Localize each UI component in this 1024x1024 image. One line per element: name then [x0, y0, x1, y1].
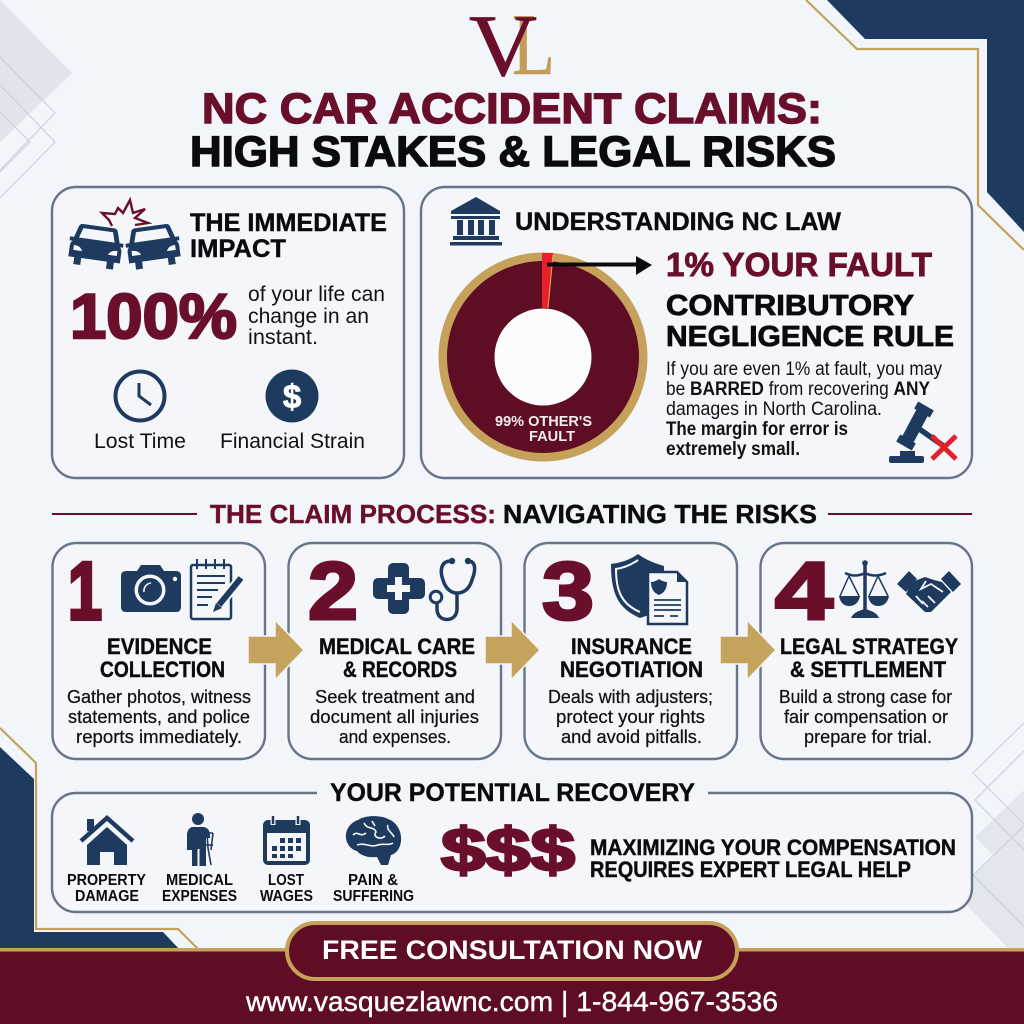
section heading: the claim process: [52, 499, 972, 529]
label: property damage: PROPERTY: [67, 872, 147, 889]
label: pain and suffering: [333, 872, 414, 905]
text: contributory negligence explanation: damages in North Carolina.: [666, 399, 882, 420]
heading: LEGAL STRATEGY: [780, 634, 958, 659]
panel: your potential recovery: [52, 779, 972, 912]
icon: crashing cars: [66, 200, 183, 271]
chart: fault donut: [438, 252, 648, 462]
icon: dollar: [266, 370, 318, 422]
panel: step 4 legal strategy and settlement: [760, 543, 972, 759]
text: [67, 686, 251, 747]
heading: your potential recovery: YOUR POTENTIAL RECOVERY: [330, 779, 695, 807]
arrow: to 1% your fault: [547, 256, 652, 275]
label: property damage: DAMAGE: [75, 888, 139, 905]
background decoration: bottom right: [955, 723, 1024, 948]
text: Seek treatment and: [315, 686, 475, 707]
heading: contributory negligence rule: [666, 290, 954, 353]
logo: VL monogram: V: [469, 0, 537, 95]
label: lost wages: LOST: [268, 872, 304, 889]
icon: person with crutch: [187, 813, 213, 866]
icon: dollar: $: [283, 378, 301, 415]
text: fair compensation or: [784, 706, 948, 727]
heading: contributory negligence rule: CONTRIBUTORY: [666, 290, 914, 322]
icon: gavel with red x: [889, 406, 956, 463]
icon: house: [81, 818, 133, 865]
text: protect your rights: [556, 706, 705, 727]
heading: the immediate impact: IMPACT: [190, 235, 286, 263]
heading: MEDICAL CARE: [319, 634, 475, 659]
label: lost wages: WAGES: [260, 888, 313, 905]
corner: bottom left navy and gold: [0, 728, 198, 950]
text: [779, 686, 952, 747]
heading: EVIDENCE: [107, 634, 212, 659]
text: Build a strong case for: [779, 686, 952, 707]
panel: step 1 evidence collection: [52, 543, 265, 759]
stat: 100%: 100%: [70, 282, 237, 352]
heading: [319, 634, 475, 682]
text: life can change: [248, 283, 385, 349]
icon: calendar: [263, 815, 310, 865]
heading: & RECORDS: [343, 657, 457, 682]
chart: fault donut: 99% OTHER'S: [495, 413, 592, 430]
text: contributory negligence explanation: extremely small.: [666, 439, 800, 460]
label: lost wages: [260, 872, 313, 905]
number 1: 1: [68, 546, 102, 637]
label: financial strain: Financial Strain: [220, 430, 365, 453]
number 4: 4: [775, 546, 833, 637]
label: medical expenses: EXPENSES: [162, 888, 237, 905]
callout: 1% your fault: 1% YOUR FAULT: [666, 246, 932, 283]
text: life can change: change in an: [248, 305, 369, 328]
text: statements, and police: [68, 706, 250, 727]
title: NC CAR ACCIDENT CLAIMS:: [202, 85, 822, 133]
icon: courthouse: [450, 197, 502, 246]
text: life can change: instant.: [248, 326, 318, 349]
text: [548, 686, 713, 747]
heading: COLLECTION: [100, 657, 225, 682]
text: Gather photos, witness: [67, 686, 251, 707]
heading: [780, 634, 958, 682]
heading: understanding NC law: UNDERSTANDING NC LAW: [515, 208, 841, 236]
panel: the immediate impact: [52, 187, 404, 478]
heading: contributory negligence rule: NEGLIGENCE RULE: [666, 321, 954, 353]
text: contributory negligence explanation: If you are even 1% at fault, you may: [666, 359, 942, 380]
text: contributory negligence explanation: [666, 359, 942, 460]
text: life can change: of your life can: [248, 283, 385, 306]
dollar signs: $$$: [441, 816, 575, 884]
text: contributory negligence explanation: be BARRED from recovering ANY: [666, 379, 930, 400]
text: reports immediately.: [76, 726, 242, 747]
background decoration: top left: [0, 0, 72, 198]
contact line: www.vasquezlawnc.com | 1-844-967-3536: [245, 986, 778, 1017]
label: pain and suffering: SUFFERING: [333, 888, 414, 905]
icon: camera: [121, 565, 181, 612]
corner: top right navy and gold: [806, 0, 1024, 250]
text: maximizing your compensation: REQUIRES EXPERT LEGAL HELP: [590, 857, 911, 882]
call to action button: FREE CONSULTATION NOW: [322, 935, 703, 965]
section heading: the claim process: NAVIGATING THE RISKS: [503, 499, 817, 529]
call to action button: [287, 923, 737, 979]
icon: clock: [116, 372, 164, 420]
arrow: step 2 to 3: [485, 620, 540, 680]
heading: & SETTLEMENT: [790, 657, 947, 682]
text: document all injuries: [310, 706, 479, 727]
text: maximizing your compensation: [590, 835, 956, 882]
label: property damage: [67, 872, 147, 905]
chart: fault donut: FAULT: [529, 428, 575, 445]
icon: notepad and pencil: [191, 559, 241, 619]
text: and avoid pitfalls.: [561, 726, 702, 747]
arrow: step 3 to 4: [720, 620, 776, 680]
icon: shield and document: [611, 554, 687, 624]
panel: step 2 medical care and records: [288, 543, 501, 759]
icon: medical cross: [373, 563, 425, 614]
text: and expenses.: [339, 726, 451, 747]
text: maximizing your compensation: MAXIMIZING YOUR COMPENSATION: [590, 835, 956, 860]
heading: [560, 634, 703, 682]
arrow: step 1 to 2: [248, 620, 304, 680]
icon: stethoscope: [430, 558, 475, 620]
footer band: [0, 923, 1024, 1024]
panel: step 3 insurance negotiation: [524, 543, 737, 759]
title: HIGH STAKES & LEGAL RISKS: [190, 128, 836, 176]
icon: handshake: [897, 571, 961, 612]
icon: brain: [346, 816, 401, 865]
text: prepare for trial.: [804, 726, 932, 747]
heading: INSURANCE: [571, 634, 692, 659]
text: [310, 686, 479, 747]
heading: the immediate impact: THE IMMEDIATE: [190, 209, 387, 237]
heading: the immediate impact: [190, 209, 387, 263]
number 3: 3: [542, 546, 594, 637]
title: [190, 85, 836, 176]
label: lost time: Lost Time: [94, 430, 186, 453]
heading: [100, 634, 225, 682]
text: Deals with adjusters;: [548, 686, 713, 707]
number 2: 2: [308, 546, 358, 637]
label: medical expenses: MEDICAL: [166, 872, 233, 889]
section heading: the claim process: THE CLAIM PROCESS:: [210, 499, 496, 529]
label: pain and suffering: PAIN &: [348, 872, 398, 889]
text: contributory negligence explanation: The margin for error is: [666, 419, 848, 440]
heading: NEGOTIATION: [560, 657, 703, 682]
label: medical expenses: [162, 872, 237, 905]
panel: understanding NC law: [421, 187, 972, 478]
icon: scales of justice: [839, 560, 889, 618]
